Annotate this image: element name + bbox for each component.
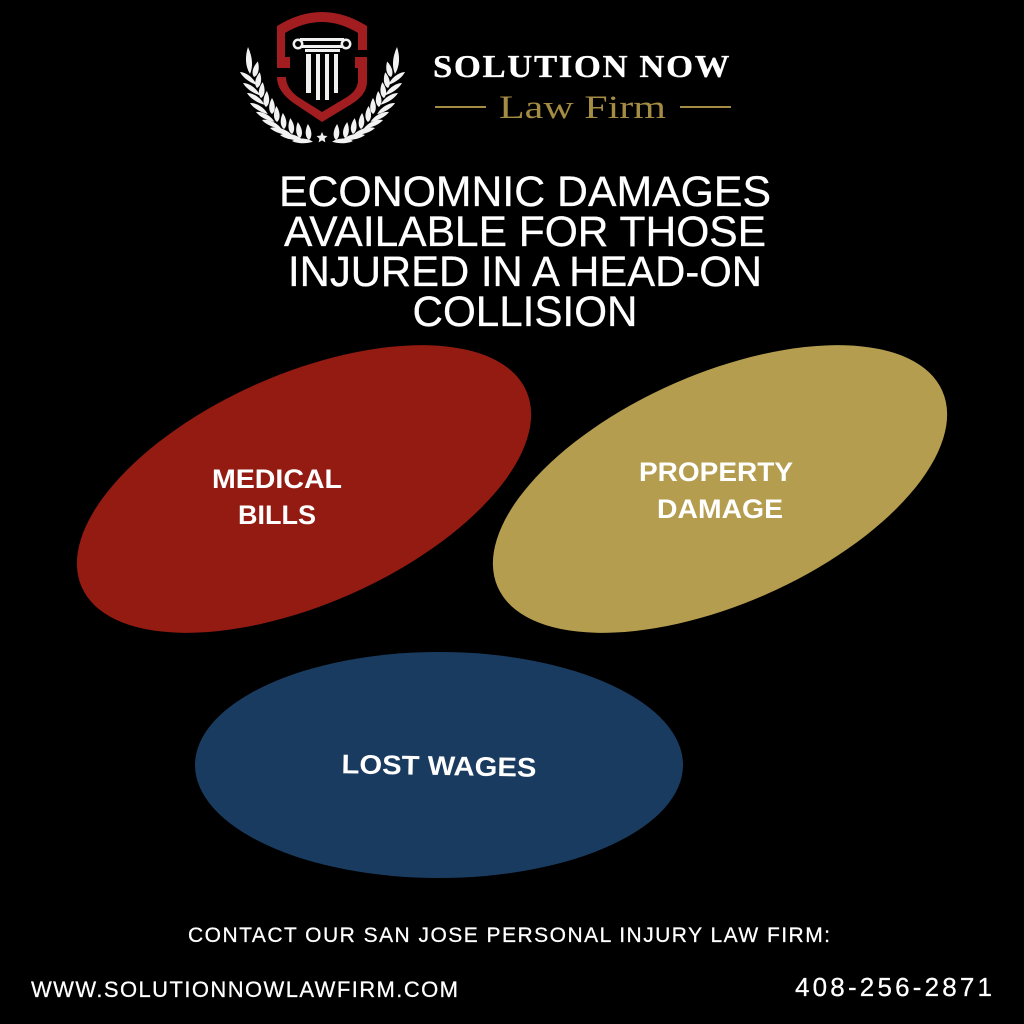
- title: COLLISION: [412, 288, 638, 336]
- icon: left laurel: [239, 47, 313, 144]
- title: AVAILABLE FOR THOSE: [284, 208, 766, 256]
- icon: right laurel: [332, 47, 406, 144]
- panel: property damage: PROPERTY: [639, 457, 793, 487]
- panel: medical bills: MEDICAL: [212, 464, 342, 494]
- panel: medical bills: BILLS: [238, 500, 316, 530]
- icon: white column: [294, 38, 350, 100]
- panel: lost wages: LOST WAGES: [341, 749, 537, 783]
- icon: star: [316, 132, 328, 142]
- contact heading: CONTACT OUR SAN JOSE PERSONAL INJURY LAW FIRM:: [188, 924, 830, 947]
- title: [279, 168, 771, 336]
- firm subtitle: Law Firm: [499, 90, 666, 126]
- title: ECONOMNIC DAMAGES: [279, 168, 771, 216]
- title: INJURED IN A HEAD-ON: [288, 248, 762, 296]
- phone: 408-256-2871: [795, 972, 992, 1002]
- website: WWW.SOLUTIONNOWLAWFIRM.COM: [31, 977, 458, 1002]
- firm name: SOLUTION NOW: [433, 48, 731, 84]
- panel: property damage: [451, 286, 989, 692]
- panel: lost wages: [195, 652, 683, 878]
- panel: medical bills: [35, 286, 573, 692]
- panel: property damage: DAMAGE: [657, 494, 783, 524]
- icon: red shield: [277, 12, 367, 122]
- logo: [239, 12, 731, 144]
